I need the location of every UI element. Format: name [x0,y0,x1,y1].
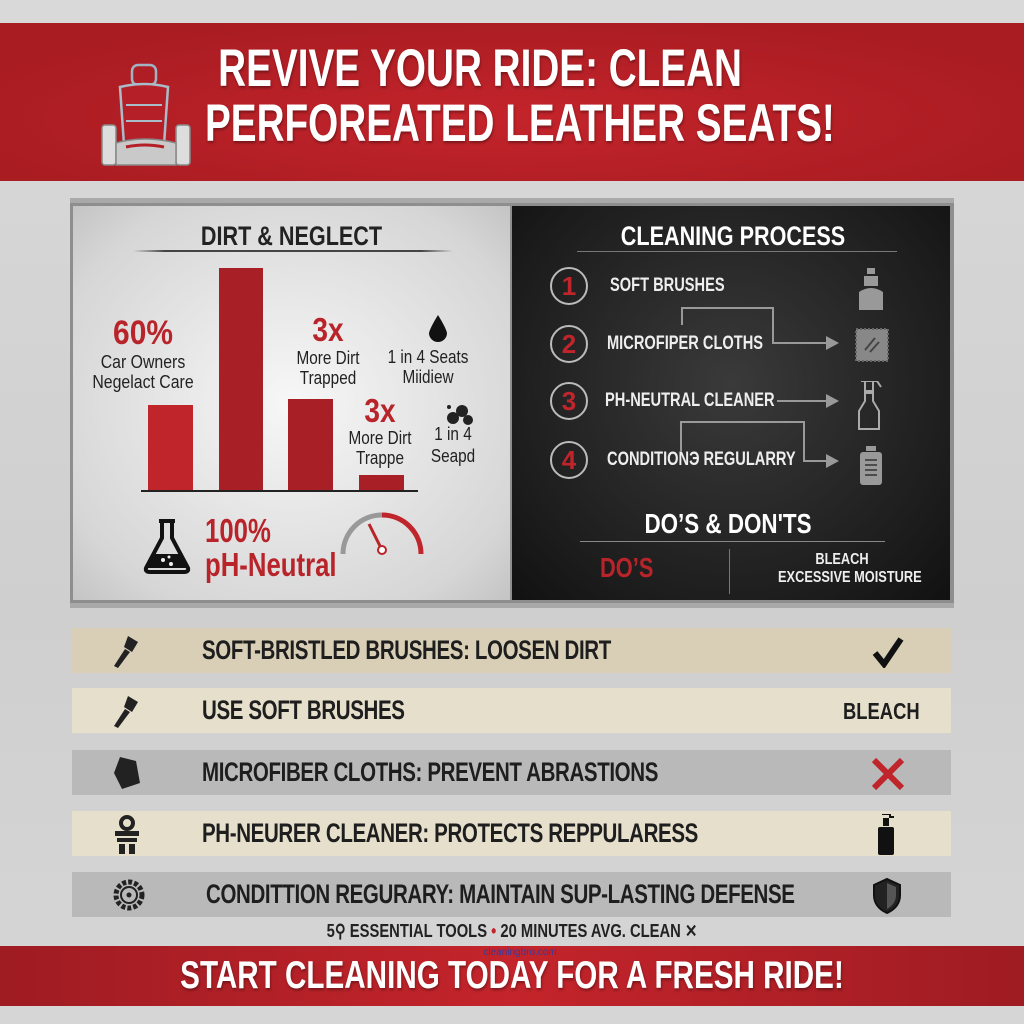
stat: 1 in 4 seats [388,347,468,387]
row 5: CONDITTION REGURARY: MAINTAIN SUP-LASTING DEFENSE [206,879,795,909]
step 2 [550,325,763,363]
stat: 3x trappe: Trappe [356,448,404,468]
don'ts list: BLEACH [815,551,869,568]
stat: 60%: 60% [113,314,173,352]
stat: 60%: Car Owners [101,352,185,372]
panel: cleaning process [512,206,950,600]
icon: drop [429,315,447,342]
icon: bottle [878,814,894,855]
icon: flask [144,519,190,574]
bottom banner [0,946,1024,1006]
icon: spray bottle [858,381,882,430]
row 4: PH-NEURER CLEANER: PROTECTS REPPULARESS [202,818,698,848]
step 2: MICROFIPER CLOTHS [607,333,763,354]
row 2 [72,688,951,733]
stat: 3x more dirt: 3x [312,311,344,348]
arrows [680,307,839,468]
stat: 1 in 4 seats: Miidiew [402,367,454,387]
step 3: 3 [562,386,576,416]
icon: brush [114,696,138,728]
step 1: 1 [562,271,576,301]
don'ts list [778,551,922,586]
do's label: DO’S [600,552,653,583]
icon: soap bottle [859,268,883,310]
stat: 100% pH-neutral: 100% [205,512,271,549]
heading: do's & don'ts: DO’S & DON'TS [644,508,812,539]
stat: 3x trappe: 3x [364,392,396,429]
row 4 [72,811,951,856]
icon: brush [114,636,138,668]
icon: cloth [855,328,889,362]
header band [0,23,1024,181]
call to action: START CLEANING TODAY FOR A FRESH RIDE! [180,954,844,997]
row 3 [72,750,951,795]
don'ts list: EXCESSIVE MOISTURE [778,569,922,586]
stat: 60% [92,314,194,392]
icon: gauge [340,512,424,555]
title: REVIVE YOUR RIDE: CLEAN [218,39,742,98]
stat: 1 in 4 seapd [431,424,475,466]
icon: gear [114,880,144,910]
footer stats: 5⚲ ESSENTIAL TOOLS • 20 MINUTES AVG. CLEAN ✕ [327,921,697,941]
label: bleach: BLEACH [843,698,920,724]
icon: x [872,758,904,790]
row 1 [72,628,951,673]
row 1: SOFT-BRISTLED BRUSHES: LOOSEN DIRT [202,635,611,665]
panel: dirt & neglect [73,206,510,600]
heading: cleaning process: CLEANING PROCESS [621,221,845,251]
stat: 3x more dirt: More Dirt [297,348,359,368]
row 5 [72,872,951,917]
stat: 3x more dirt: Trapped [300,368,356,388]
watermark: cleaningbro.com [483,947,557,958]
stat: 3x trappe [349,392,412,468]
stat: 3x more dirt [297,311,360,388]
bar chart [141,268,418,492]
row 2: USE SOFT BRUSHES [202,695,405,725]
icon: vacuum [115,815,139,854]
step 4: 4 [562,445,576,475]
stat: 100% pH-neutral [205,512,337,583]
stat: 1 in 4 seats: 1 in 4 Seats [388,347,468,367]
icon: cloth [114,757,140,789]
stat: 1 in 4 seapd: Seapd [431,446,475,466]
heading: dirt & neglect: DIRT & NEGLECT [201,221,382,251]
stat: 100% pH-neutral: pH-Neutral [205,546,337,583]
stat: 60%: Negelact Care [92,372,194,392]
step 4 [550,441,796,479]
main panel frame [70,198,954,608]
title: PERFOREATED LEATHER SEATS! [205,94,835,153]
step 3: PH-NEUTRAL CLEANER [605,390,775,411]
stat: 1 in 4 seapd: 1 in 4 [434,424,472,444]
icon: car seat [101,64,191,166]
step 3 [550,382,775,420]
stat: 3x trappe: More Dirt [349,428,411,448]
step 1 [550,267,725,305]
title [205,39,835,153]
step 4: CONDITIONЭ REGULARRY [607,449,796,470]
icon: conditioner bottle [860,446,882,485]
step 1: SOFT BRUSHES [610,275,725,296]
icon: check [872,637,904,668]
icon: mold [447,405,473,425]
icon: shield [873,878,901,914]
row 3: MICROFIBER CLOTHS: PREVENT ABRASTIONS [202,757,658,787]
step 2: 2 [562,329,576,359]
